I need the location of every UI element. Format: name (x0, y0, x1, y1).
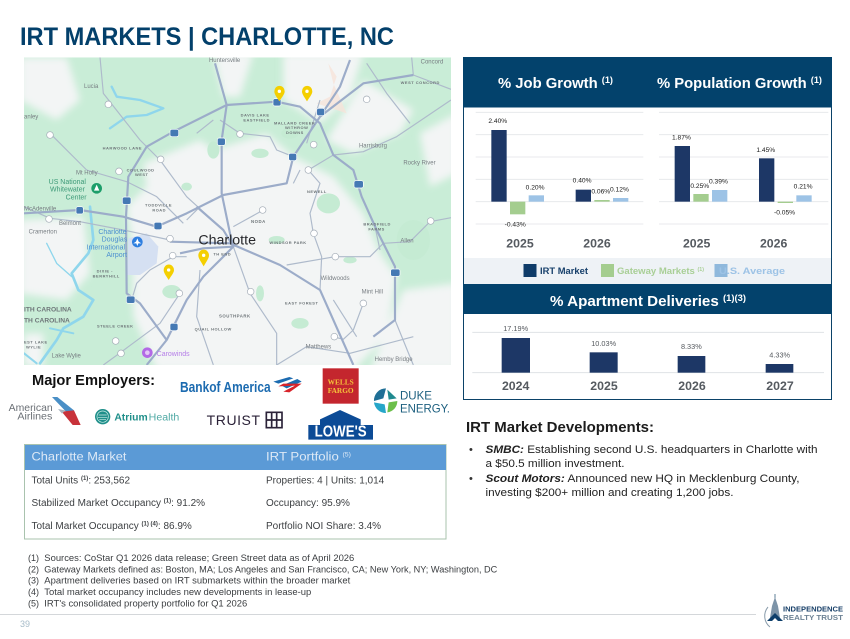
logo: Duke Energy: ENERGY. (400, 401, 450, 415)
map labels: Airport (106, 252, 127, 259)
map labels: US National (49, 179, 86, 186)
map labels: Lake Wylie (52, 353, 82, 359)
table column: IRT portfolio: Occupancy: 95.9% (266, 498, 350, 509)
footnotes: (3) (28, 576, 39, 586)
map labels: ROAD (152, 208, 166, 213)
map labels: WITHROW (285, 125, 308, 130)
map labels: QUAIL HOLLOW (195, 326, 232, 331)
map labels: Mt Holly (76, 170, 98, 176)
chart: apartment deliveries (472, 324, 824, 393)
logo: American Airlines: Airlines (17, 412, 52, 423)
highways (24, 60, 413, 365)
panel background (464, 58, 832, 400)
chart: apartment deliveries: 10.03% (591, 339, 617, 348)
map labels: DOWNS (286, 130, 304, 135)
title: IRT MARKETS | CHARLOTTE, NC (20, 23, 394, 51)
legend: U.S. Average (719, 266, 785, 276)
header band: growth: % Job Growth (498, 76, 595, 92)
text block: market developments bullets: investing $200+ million and creating 1,200 jobs. (486, 487, 734, 499)
chart: population growth: 1.87% (672, 135, 691, 142)
map labels: Mint Hill (362, 290, 383, 296)
header band: apartment deliveries (463, 284, 832, 314)
chart: apartment deliveries: 4.33% (769, 350, 791, 359)
map labels: anley (24, 114, 38, 120)
footnotes: (2) (28, 564, 39, 574)
legend: (1) (698, 267, 704, 273)
map labels: Hemby Bridge (375, 357, 413, 363)
table column: Charlotte market: (1) (164, 498, 171, 504)
logo: American Airlines (9, 397, 81, 425)
text block: market developments bullets (469, 444, 818, 499)
yellow property pins (164, 86, 312, 280)
map labels: EASTFIELD (243, 117, 270, 122)
legend: Gateway Markets (617, 266, 691, 276)
panel: market growth charts (463, 57, 832, 400)
chart: apartment deliveries: 8.33% (681, 342, 702, 351)
logo: Wells Fargo: FARGO (328, 386, 354, 395)
map labels: NODA (251, 219, 266, 224)
footnotes: Apartment deliveries based on IRT submarkets within the broader market (44, 576, 351, 586)
logo: Truist: TRUIST (207, 412, 260, 428)
legend: IRT Market (540, 266, 588, 276)
legend (464, 258, 831, 284)
table column: Charlotte market (32, 476, 205, 532)
map labels: TH END (213, 251, 231, 256)
chart: population growth: 0.39% (709, 179, 728, 186)
footnotes: IRT's consolidated property portfolio for Q1 2026 (44, 598, 247, 608)
map labels: DIXIE - (97, 268, 113, 273)
map labels: FARMS (368, 227, 385, 232)
chart: job growth: 0.20% (526, 184, 545, 191)
logo: Atrium Health (95, 409, 179, 424)
chart: population growth: 2025 (683, 236, 711, 250)
header band: apartment deliveries: (1)(3) (723, 293, 746, 303)
map labels: Douglas (102, 237, 128, 244)
logo: Lowe's: LOWE'S (315, 423, 367, 440)
chart: apartment deliveries: 2026 (678, 379, 706, 393)
map of Charlotte with property pins (20, 53, 457, 370)
map labels: Allen (400, 238, 414, 244)
footnotes (28, 553, 498, 608)
minor roads (24, 57, 451, 365)
chart: population growth: 0.21% (794, 184, 813, 191)
map labels: BERRYHILL (93, 273, 120, 278)
logo: Lowe's (308, 410, 373, 440)
map place icons (91, 183, 153, 358)
map labels: HARWOOD LANE (103, 145, 142, 150)
map labels: Belmont (59, 221, 81, 227)
map labels: Charlotte (198, 232, 256, 247)
header band: growth: % Population Growth (657, 76, 804, 92)
chart: population growth: 0.25% (690, 183, 709, 190)
map labels: WYLIE (26, 344, 41, 349)
footnotes: (1) (28, 553, 39, 563)
table: Charlotte market and IRT portfolio (24, 444, 446, 539)
logo: American Airlines: American (9, 403, 53, 414)
map labels: WEST (135, 172, 149, 177)
logo: Atrium Health: Atrium (114, 412, 148, 423)
map labels: MALLARD CREEK (274, 120, 315, 125)
chart: job growth: -0.43% (505, 221, 526, 228)
logo: Independence Realty Trust (765, 594, 844, 627)
text block: market developments bullets: • (469, 473, 473, 485)
map labels: Huntersville (209, 58, 241, 64)
map labels: NEWELL (307, 189, 327, 194)
table column: Charlotte market: : 86.9% (158, 521, 192, 532)
map labels: DAVIS LAKE (241, 113, 270, 118)
map labels: ITH CAROLINA (24, 307, 72, 314)
rivers and lakes (24, 87, 163, 363)
map labels: EST LAKE (24, 340, 48, 345)
heading: IRT Market Developments: IRT Market Developments: (466, 419, 654, 436)
map labels: WINDSOR PARK (269, 240, 307, 245)
table header: Charlotte Market (32, 450, 127, 464)
map labels: Matthews (306, 345, 331, 351)
airport (127, 233, 158, 275)
table column: Charlotte market: : 91.2% (171, 498, 205, 509)
table column: Charlotte market: Stabilized Market Occupancy (32, 498, 161, 509)
chart: apartment deliveries: 2024 (502, 379, 530, 393)
table header: (5) (342, 452, 351, 458)
table header (25, 445, 446, 470)
chart: population growth: -0.05% (774, 210, 795, 217)
map labels: Whitewater (50, 187, 86, 194)
chart: population growth: 1.45% (756, 147, 775, 154)
footnotes: (5) (28, 598, 39, 608)
table column: Charlotte market: : 253,562 (88, 476, 130, 486)
table column: Charlotte market: (1) (4) (142, 522, 158, 528)
chart: job growth: 0.06% (591, 189, 610, 196)
logo: Atrium Health: Health (149, 412, 179, 423)
logo: Independence Realty Trust: INDEPENDENCE (783, 604, 843, 614)
text block: market developments bullets: • (469, 444, 473, 456)
table column: IRT portfolio: Portfolio NOI Share: 3.4% (266, 521, 381, 532)
map labels: International (87, 244, 126, 251)
chart: job growth: 2025 (506, 236, 534, 250)
map labels: SOUTHPARK (219, 313, 251, 318)
map labels: Rocky River (403, 160, 436, 166)
map labels: WEST CONCORD (401, 80, 440, 85)
map labels: Concord (421, 59, 443, 65)
page number: 39 (20, 619, 30, 629)
table column: IRT portfolio (266, 476, 385, 532)
map labels (24, 58, 443, 363)
text block: market developments bullets: a $50.5 million investment. (486, 458, 624, 470)
text block: market developments bullets: Scout Motors: Announced new HQ in Mecklenburg County, (486, 473, 800, 485)
map labels: McAdenville (24, 206, 57, 212)
logo: Bank of America: Bankof America (180, 380, 272, 396)
footnotes: Total market occupancy includes new developments in lease-up (44, 587, 311, 597)
chart: apartment deliveries: 2027 (766, 379, 794, 393)
map labels: Cramerton (29, 230, 57, 236)
table header: IRT Portfolio (266, 450, 334, 464)
map labels: Carowinds (157, 351, 190, 358)
chart: job growth: 0.12% (610, 187, 629, 194)
table column: Charlotte market: Total Market Occupancy (32, 521, 139, 532)
logo: Wells Fargo: WELLS (328, 377, 354, 386)
table column: Charlotte market: Total Units (32, 476, 78, 486)
map labels: Charlotte (98, 229, 127, 236)
map labels: Lucia (84, 84, 99, 90)
text block: market developments bullets: SMBC: Establishing second U.S. headquarters in Charlotte with (486, 444, 818, 456)
map labels: Wildwoods (321, 276, 350, 282)
map labels: Harrisburg (359, 143, 387, 149)
map labels: Center (66, 194, 87, 201)
footnotes: Sources: CoStar Q1 2026 data release; Green Street data as of April 2026 (44, 553, 354, 563)
logo: Independence Realty Trust: REALTY TRUST (783, 613, 844, 622)
chart: population growth (659, 112, 828, 250)
logo: Duke Energy (374, 388, 450, 415)
chart: job growth: 2026 (583, 236, 611, 250)
table column: Charlotte market: (1) (81, 476, 88, 482)
logo: Wells Fargo (323, 368, 359, 404)
map labels: STEELE CREEK (97, 324, 134, 329)
chart: job growth: 0.40% (573, 178, 592, 185)
map labels: COULWOOD (127, 167, 155, 172)
heading: Major Employers: Major Employers: (32, 372, 155, 389)
footnotes: Gateway Markets defined as: Boston, MA; Los Angeles and San Francisco, CA; New York, NY; Washington, DC (44, 564, 498, 574)
chart: job growth: 2.40% (488, 118, 507, 125)
map labels: EAST FOREST (285, 301, 318, 306)
map labels: TODDVILLE (145, 203, 172, 208)
chart: apartment deliveries: 2025 (590, 379, 618, 393)
logo: Duke Energy: DUKE (400, 389, 432, 403)
footnotes: (4) (28, 587, 39, 597)
header band: apartment deliveries: % Apartment Deliveries (550, 294, 711, 310)
map labels: BRADFIELD (363, 222, 391, 227)
employer logos (9, 368, 450, 440)
chart: apartment deliveries: 17.19% (503, 324, 529, 333)
header band: growth (463, 57, 832, 108)
header band: growth: (1) (602, 75, 613, 85)
map labels: TH CAROLINA (24, 318, 70, 325)
header band: growth: (1) (811, 75, 822, 85)
chart: job growth (476, 112, 643, 250)
chart: population growth: 2026 (760, 236, 788, 250)
table column: IRT portfolio: Properties: 4 | Units: 1,014 (266, 476, 385, 486)
route shields (76, 99, 400, 331)
